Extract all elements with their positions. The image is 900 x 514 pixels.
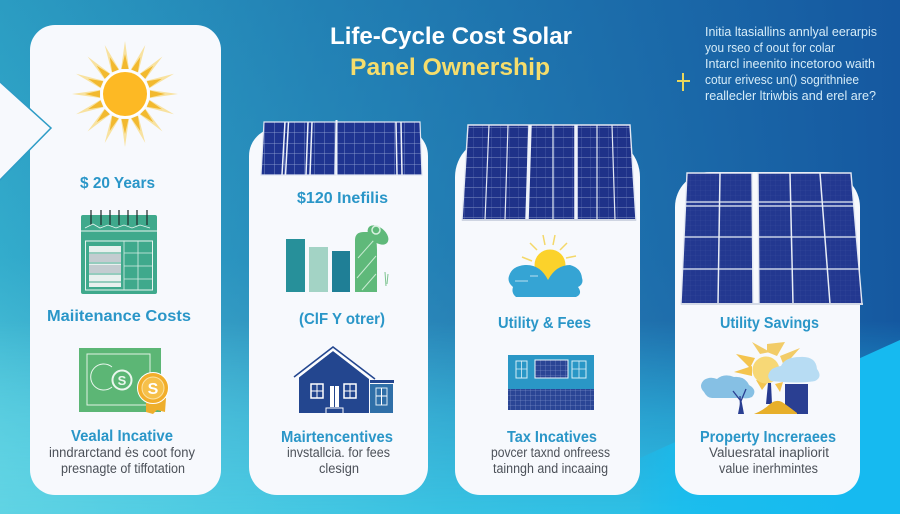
- text block: card 1 description: [49, 445, 195, 476]
- heading: tax incentives: Tax Incatives: [507, 429, 597, 446]
- panel: card 1: [30, 25, 221, 495]
- text block: card 2 description: [287, 445, 390, 476]
- solar panels: [681, 173, 863, 304]
- icon: banknote and medal: [79, 348, 168, 414]
- heading: maintenance incentives: Mairtencentives: [281, 429, 393, 446]
- icon: sun: [72, 41, 178, 147]
- heading: per year: (ClF Y otrer): [299, 311, 385, 328]
- panel: card 3: [455, 125, 640, 495]
- text block: card 3 description: tainngh and incaaing: [493, 461, 608, 476]
- text block: intro note: [705, 24, 877, 103]
- text block: intro note: reallecler ltriwbis and erel are?: [705, 88, 876, 103]
- text block: intro note: Initia ltasiallins annlyal eerarpis: [705, 24, 877, 39]
- text block: intro note: you rseo cf oout for colar: [705, 40, 836, 55]
- icon: house: [294, 347, 394, 413]
- text block: intro note: Intarcl ineenito incetoroo waith: [705, 56, 875, 71]
- heading: property increases: Property Increraees: [700, 429, 836, 446]
- icon: calendar: [81, 210, 157, 294]
- left arrow shape: [0, 80, 51, 182]
- heading: incentive: Vealal Incative: [71, 428, 173, 445]
- icon: building with solar roof: [508, 355, 594, 410]
- panel: card 4: [675, 172, 863, 495]
- text block: card 3 description: povcer taxnd onfreess: [491, 445, 610, 460]
- heading: 20 years: $ 20 Years: [80, 175, 155, 192]
- icon: banknote and medal: S: [118, 373, 127, 388]
- icon: sun and cloud: [508, 235, 582, 297]
- text block: card 1 description: inndrarctand ės coot fony: [49, 445, 195, 460]
- text block: intro note: cotur erivesc un() sogrithniee: [705, 72, 859, 87]
- text block: card 4 description: [709, 445, 829, 476]
- heading: utility and fees: Utility & Fees: [498, 315, 591, 332]
- title: [330, 23, 572, 81]
- text block: card 4 description: Valuesratal inapliorit: [709, 445, 829, 460]
- text block: card 4 description: value inerhmintes: [719, 461, 818, 476]
- heading: 120 benefits: $120 Inefilis: [297, 190, 388, 207]
- heading: maintenance costs: Maiitenance Costs: [47, 308, 191, 325]
- title: Panel Ownership: [350, 54, 550, 81]
- solar panels: [261, 120, 422, 176]
- text block: card 2 description: clesign: [319, 461, 359, 476]
- solar panels: [462, 125, 636, 220]
- bar chart: [286, 222, 392, 292]
- icon: banknote and medal: S: [148, 381, 159, 398]
- text block: card 3 description: [491, 445, 610, 476]
- text block: card 1 description: presnagte of tiffotation: [61, 461, 185, 476]
- icon: sun, clouds, tree and building: [701, 342, 820, 414]
- title: Life-Cycle Cost Solar: [330, 23, 572, 50]
- icon: yellow plus: [677, 73, 690, 91]
- text block: card 2 description: invstallcia. for fees: [287, 445, 390, 460]
- panel: card 2: [249, 120, 428, 495]
- heading: utility savings: Utility Savings: [720, 315, 819, 332]
